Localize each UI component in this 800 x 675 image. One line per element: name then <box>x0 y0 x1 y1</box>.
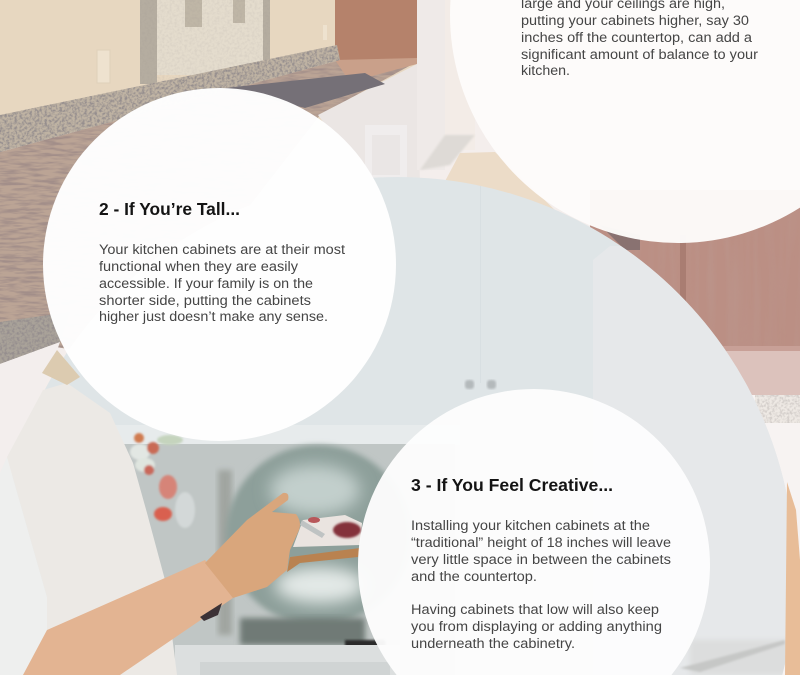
text: circle 3 body: Having cabinets that low will also keep <box>411 602 659 617</box>
countertop <box>0 60 420 362</box>
text: circle 2 body: shorter side, putting the cabinets <box>99 293 311 308</box>
outlet <box>97 50 110 83</box>
backsplash <box>124 444 406 658</box>
stove <box>225 73 385 108</box>
lower cabinets <box>318 64 420 185</box>
woman: left sleeve <box>0 457 47 675</box>
toast <box>287 515 362 572</box>
cabinet seams and handles <box>480 178 481 383</box>
text: circle 1 body: putting your cabinets higher, say 30 <box>521 13 749 28</box>
backsplash stone <box>157 0 263 75</box>
torso right <box>621 246 752 395</box>
woman: arm at right edge <box>785 482 800 675</box>
woman: apron <box>7 383 177 675</box>
floor <box>420 135 475 170</box>
heading: 3 - If You Feel Creative: 3 - If You Feel Creative... <box>411 475 613 495</box>
text: circle 3 body: and the countertop. <box>411 569 537 584</box>
flowers <box>130 433 195 528</box>
woman: neck <box>42 350 80 385</box>
pale floor left of woman <box>0 342 60 475</box>
text: circle 3 body: underneath the cabinetry. <box>411 636 575 651</box>
panel: circle 3 <box>358 389 710 675</box>
text: circle 1 body: inches off the countertop, can add a <box>521 30 753 45</box>
text: circle 3 body: “traditional” height of 18 inches will leave <box>411 535 671 550</box>
hood <box>335 0 417 60</box>
text: circle 1 body: kitchen. <box>521 63 570 78</box>
text: circle 1 body <box>521 0 759 78</box>
text: circle 2 body: higher just doesn’t make any sense. <box>99 309 328 324</box>
text: circle 2 body: accessible. If your family is on the <box>99 276 313 291</box>
wood cabinet right <box>590 190 800 350</box>
text: circle 2 body: functional when they are easily <box>99 259 298 274</box>
panel: circle 1 <box>450 0 800 243</box>
bracelet <box>200 603 222 621</box>
text: circle 1 body: significant amount of balance to your <box>521 47 759 62</box>
text: circle 3 body <box>411 518 671 651</box>
text: circle 2 body: Your kitchen cabinets are at their most <box>99 242 345 257</box>
counter edge <box>0 312 70 364</box>
text: circle 3 body: very little space in between the cabinets <box>411 552 671 567</box>
panel: circle 2 <box>43 88 396 441</box>
heading: 2 - If You're Tall: 2 - If You’re Tall... <box>99 199 240 219</box>
door frame <box>417 0 445 170</box>
text: circle 3 body: you from displaying or adding anything <box>411 619 662 634</box>
text: circle 2 body <box>99 242 345 324</box>
photo circle: woman in kitchen <box>45 177 787 675</box>
plate <box>226 442 386 620</box>
text: circle 3 body: Installing your kitchen cabinets at the <box>411 518 650 533</box>
counter <box>175 645 400 675</box>
granite splash <box>0 45 340 152</box>
woman: forearm and hand <box>23 493 300 675</box>
